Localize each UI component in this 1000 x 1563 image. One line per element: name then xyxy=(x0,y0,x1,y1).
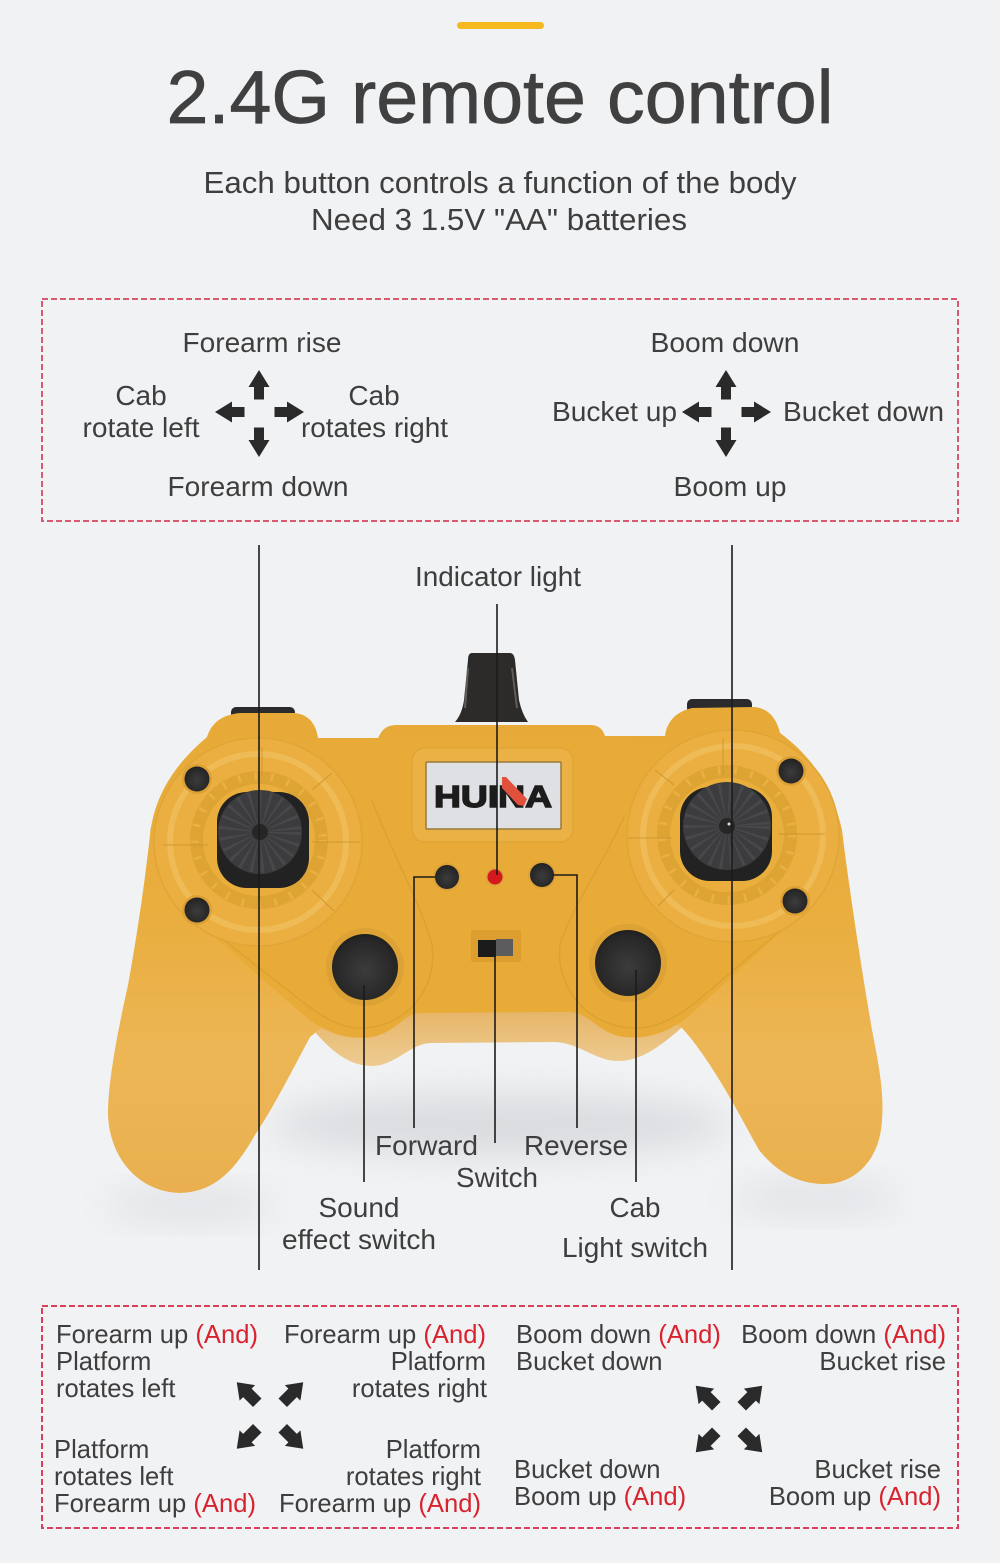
right group labels xyxy=(514,1321,946,1511)
left joystick labels xyxy=(82,327,448,502)
right joystick labels xyxy=(552,327,944,502)
right joystick labels: Bucket down xyxy=(783,396,944,427)
left group labels xyxy=(54,1321,487,1518)
small buttons and LED xyxy=(433,861,556,891)
left joystick labels: Cab xyxy=(348,380,400,411)
slide switch xyxy=(471,930,521,962)
left joystick labels: Forearm down xyxy=(168,471,348,502)
right group labels: Bucket down xyxy=(516,1348,663,1376)
subtitle xyxy=(204,166,797,237)
logo plate xyxy=(412,748,573,842)
label: reverse: Reverse xyxy=(524,1130,628,1161)
panel: combined joystick directions xyxy=(42,1306,958,1528)
label: switch: Switch xyxy=(456,1162,538,1193)
right group labels: Bucket rise xyxy=(819,1348,946,1376)
screws xyxy=(182,756,810,925)
left joystick labels: Forearm rise xyxy=(182,327,342,358)
left group labels: Forearm up (And) xyxy=(54,1490,256,1518)
left group labels: Platform xyxy=(56,1348,151,1376)
lower body band xyxy=(305,990,690,1066)
right group labels: Boom down (And) xyxy=(516,1321,721,1349)
left group labels: Platform xyxy=(391,1348,486,1376)
left group labels: Platform xyxy=(54,1436,149,1464)
right joystick labels: Boom up xyxy=(674,471,786,502)
title: 2.4G remote control xyxy=(166,55,834,139)
face plate xyxy=(150,738,835,1038)
icon: right joystick arrows xyxy=(682,370,771,457)
subtitle: Each button controls a function of the body xyxy=(204,166,797,200)
left group labels: rotates right xyxy=(352,1375,487,1403)
right group labels: Bucket rise xyxy=(814,1456,941,1484)
left group labels: Forearm up (And) xyxy=(56,1321,258,1349)
left group labels: rotates left xyxy=(54,1463,174,1491)
label: indicator light: Indicator light xyxy=(415,561,581,592)
right group labels: Boom down (And) xyxy=(741,1321,946,1349)
left gimbal ring xyxy=(154,738,362,946)
left group labels: rotates right xyxy=(346,1463,481,1491)
label: cab light switch: Cab xyxy=(610,1192,660,1223)
icon: left diagonal arrows xyxy=(229,1374,311,1457)
controller body xyxy=(108,707,883,1193)
left group labels: Forearm up (And) xyxy=(284,1321,486,1349)
left joystick labels: rotate left xyxy=(82,412,200,443)
controller photo xyxy=(105,653,900,1217)
accent bar xyxy=(457,22,544,29)
shoulder buttons xyxy=(231,699,752,719)
right joystick labels: Bucket up xyxy=(552,396,677,427)
right group labels: Boom up (And) xyxy=(769,1483,941,1511)
left joystick labels: Cab xyxy=(115,380,167,411)
right joystick labels: Boom down xyxy=(650,327,800,358)
right joystick xyxy=(680,782,772,881)
panel: joystick directions xyxy=(42,299,958,521)
icon: left joystick arrows xyxy=(215,370,304,457)
label: sound effect switch: Sound xyxy=(318,1192,400,1223)
left joystick labels: rotates right xyxy=(301,412,448,443)
left group labels: Forearm up (And) xyxy=(279,1490,481,1518)
logo plate: HUINA xyxy=(434,779,552,814)
icon: right diagonal arrows xyxy=(688,1378,770,1460)
right group labels: Bucket down xyxy=(514,1456,661,1484)
big round buttons xyxy=(326,924,667,1006)
antenna xyxy=(455,653,528,722)
left group labels: Platform xyxy=(386,1436,481,1464)
label: sound effect switch: effect switch xyxy=(282,1224,436,1255)
subtitle: Need 3 1.5V "AA" batteries xyxy=(311,203,687,237)
label: cab light switch xyxy=(562,1192,708,1263)
left group labels: rotates left xyxy=(56,1375,176,1403)
label: sound effect switch xyxy=(282,1192,436,1255)
right group labels: Boom up (And) xyxy=(514,1483,686,1511)
label: forward: Forward xyxy=(375,1130,478,1161)
label: cab light switch: Light switch xyxy=(562,1232,708,1263)
left joystick xyxy=(217,790,309,888)
right gimbal ring xyxy=(627,730,839,942)
callout lines xyxy=(259,545,732,1270)
